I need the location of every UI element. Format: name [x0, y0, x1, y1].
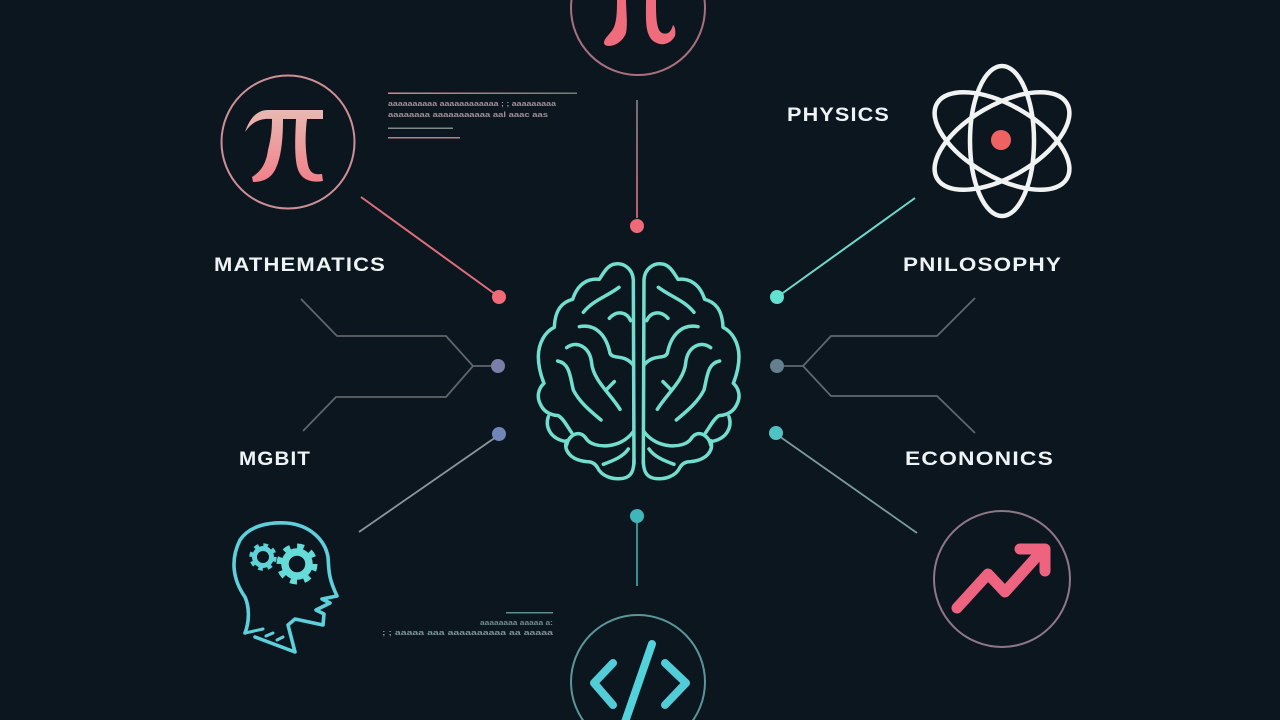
icon: large gear — [280, 547, 314, 581]
connector: lower left — [359, 427, 506, 532]
connector: top — [630, 100, 644, 233]
icon: atom, physics — [919, 66, 1085, 216]
text block: upper caption: aaaaaaaa aaaaaaaaaaa aal aaac aas — [388, 112, 548, 119]
connector: upper left — [361, 197, 506, 304]
text block: lower caption: aaaaaaaa aaaaa a: — [480, 620, 553, 627]
connector: upper right — [770, 198, 915, 304]
connector: right branch — [770, 298, 975, 433]
text block: lower caption: ; ; aaaaa aaa aaaaaaaaaa aa aaaaa — [382, 630, 553, 637]
icon: pi in circle, mathematics — [222, 76, 354, 208]
label: economics: ECONONICS — [905, 449, 1054, 470]
connector: left branch — [301, 299, 505, 431]
connector: bottom — [630, 509, 644, 586]
icon: rising chart arrow, economics — [934, 511, 1070, 647]
central brain icon — [538, 264, 739, 479]
text block: upper caption — [388, 92, 577, 138]
label: physics: PHYSICS — [787, 105, 890, 126]
icon: small gear — [252, 546, 274, 568]
icon: head with gears — [234, 523, 337, 652]
label: mgbit: MGBIT — [239, 449, 311, 470]
icon: code brackets in circle — [571, 615, 705, 720]
text block: upper caption: aaaaaaaaaa aaaaaaaaaaaa ; ; aaaaaaaaa — [388, 101, 556, 108]
label: philosophy: PNILOSOPHY — [903, 255, 1062, 276]
icon: pi in circle, top cropped — [571, 0, 705, 75]
connector: lower right — [769, 426, 917, 533]
text block: lower caption — [382, 612, 553, 637]
label: mathematics: MATHEMATICS — [214, 255, 386, 276]
